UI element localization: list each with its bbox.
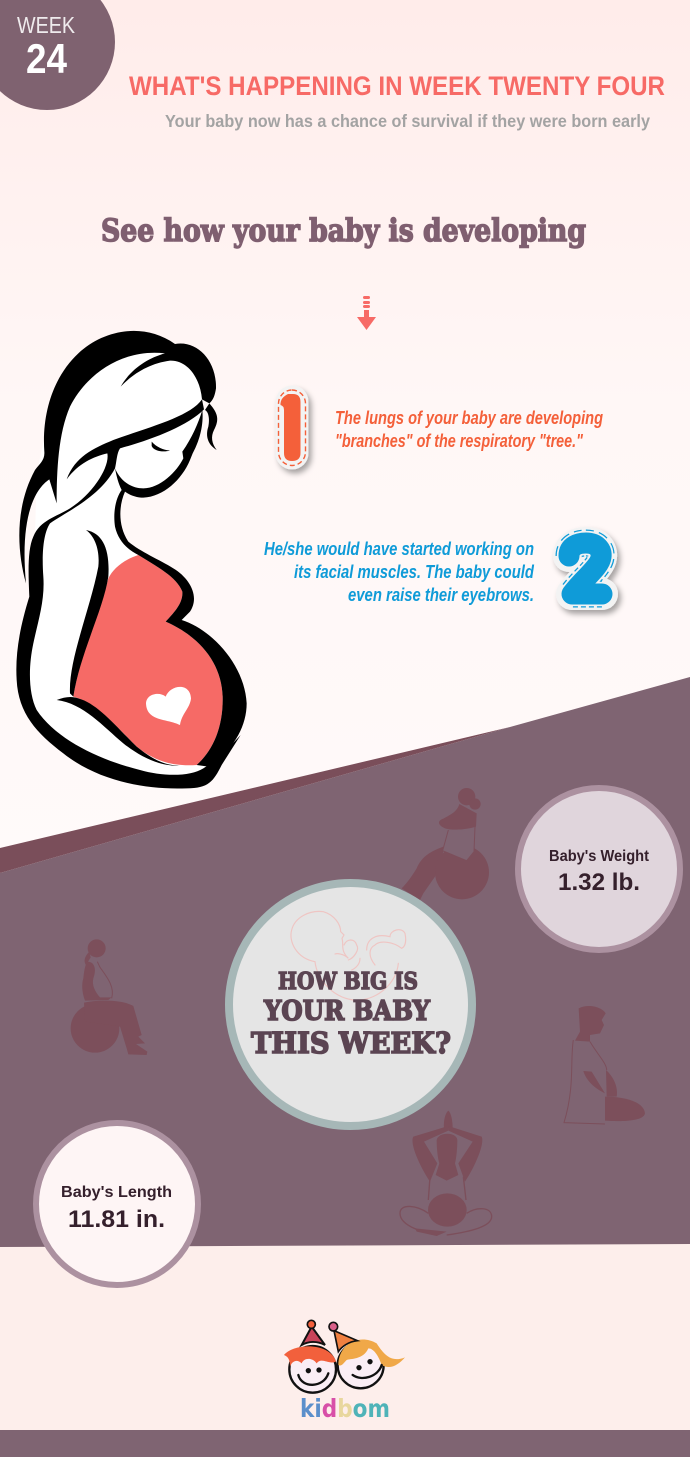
icon: number 1 sticker <box>278 390 306 466</box>
stat: baby's length <box>36 1123 198 1285</box>
silhouette: kneeling woman <box>564 1006 645 1124</box>
central circle: how big is your baby: HOW BIG IS <box>278 968 418 995</box>
icon: down arrow <box>357 296 376 330</box>
week badge: WEEK <box>17 12 76 38</box>
text: fact one: The lungs of your baby are developing <box>335 408 603 428</box>
central circle: how big is your baby: YOUR BABY <box>263 996 431 1027</box>
illustration: pregnant woman <box>16 331 247 789</box>
stat: baby's weight <box>518 788 680 950</box>
text: fact one <box>335 408 603 451</box>
silhouette: woman on ball, top <box>402 788 489 900</box>
text: fact two: even raise their eyebrows. <box>348 585 534 605</box>
silhouette: woman on ball, left <box>71 939 147 1055</box>
stat: baby's length: Baby's Length <box>61 1184 172 1201</box>
central circle: how big is your baby: THIS WEEK? <box>251 1026 451 1060</box>
subtitle: Your baby now has a chance of survival if they were born early <box>165 111 650 131</box>
diagonal mauve panel <box>0 677 690 1247</box>
text: fact two: its facial muscles. The baby could <box>294 562 535 582</box>
logo: kidbom: kidbom <box>300 1394 390 1423</box>
text: fact two: He/she would have started working on <box>264 539 534 559</box>
icon: number 2 sticker <box>569 543 602 594</box>
week badge <box>0 0 115 110</box>
text: fact two <box>264 539 535 605</box>
footer bar <box>0 1430 690 1457</box>
section heading: See how your baby is developing <box>101 213 586 249</box>
stat: baby's length: 11.81 in. <box>68 1206 165 1233</box>
text: fact one: "branches" of the respiratory "tree." <box>335 431 583 451</box>
icon: fetus outline <box>291 911 406 1000</box>
week badge: 24 <box>26 35 68 82</box>
silhouette: meditating woman <box>400 1111 492 1236</box>
central circle: how big is your baby <box>229 883 472 1126</box>
logo: kidbom <box>284 1320 405 1423</box>
stat: baby's weight: 1.32 lb. <box>558 869 640 896</box>
stat: baby's weight: Baby's Weight <box>549 848 650 865</box>
